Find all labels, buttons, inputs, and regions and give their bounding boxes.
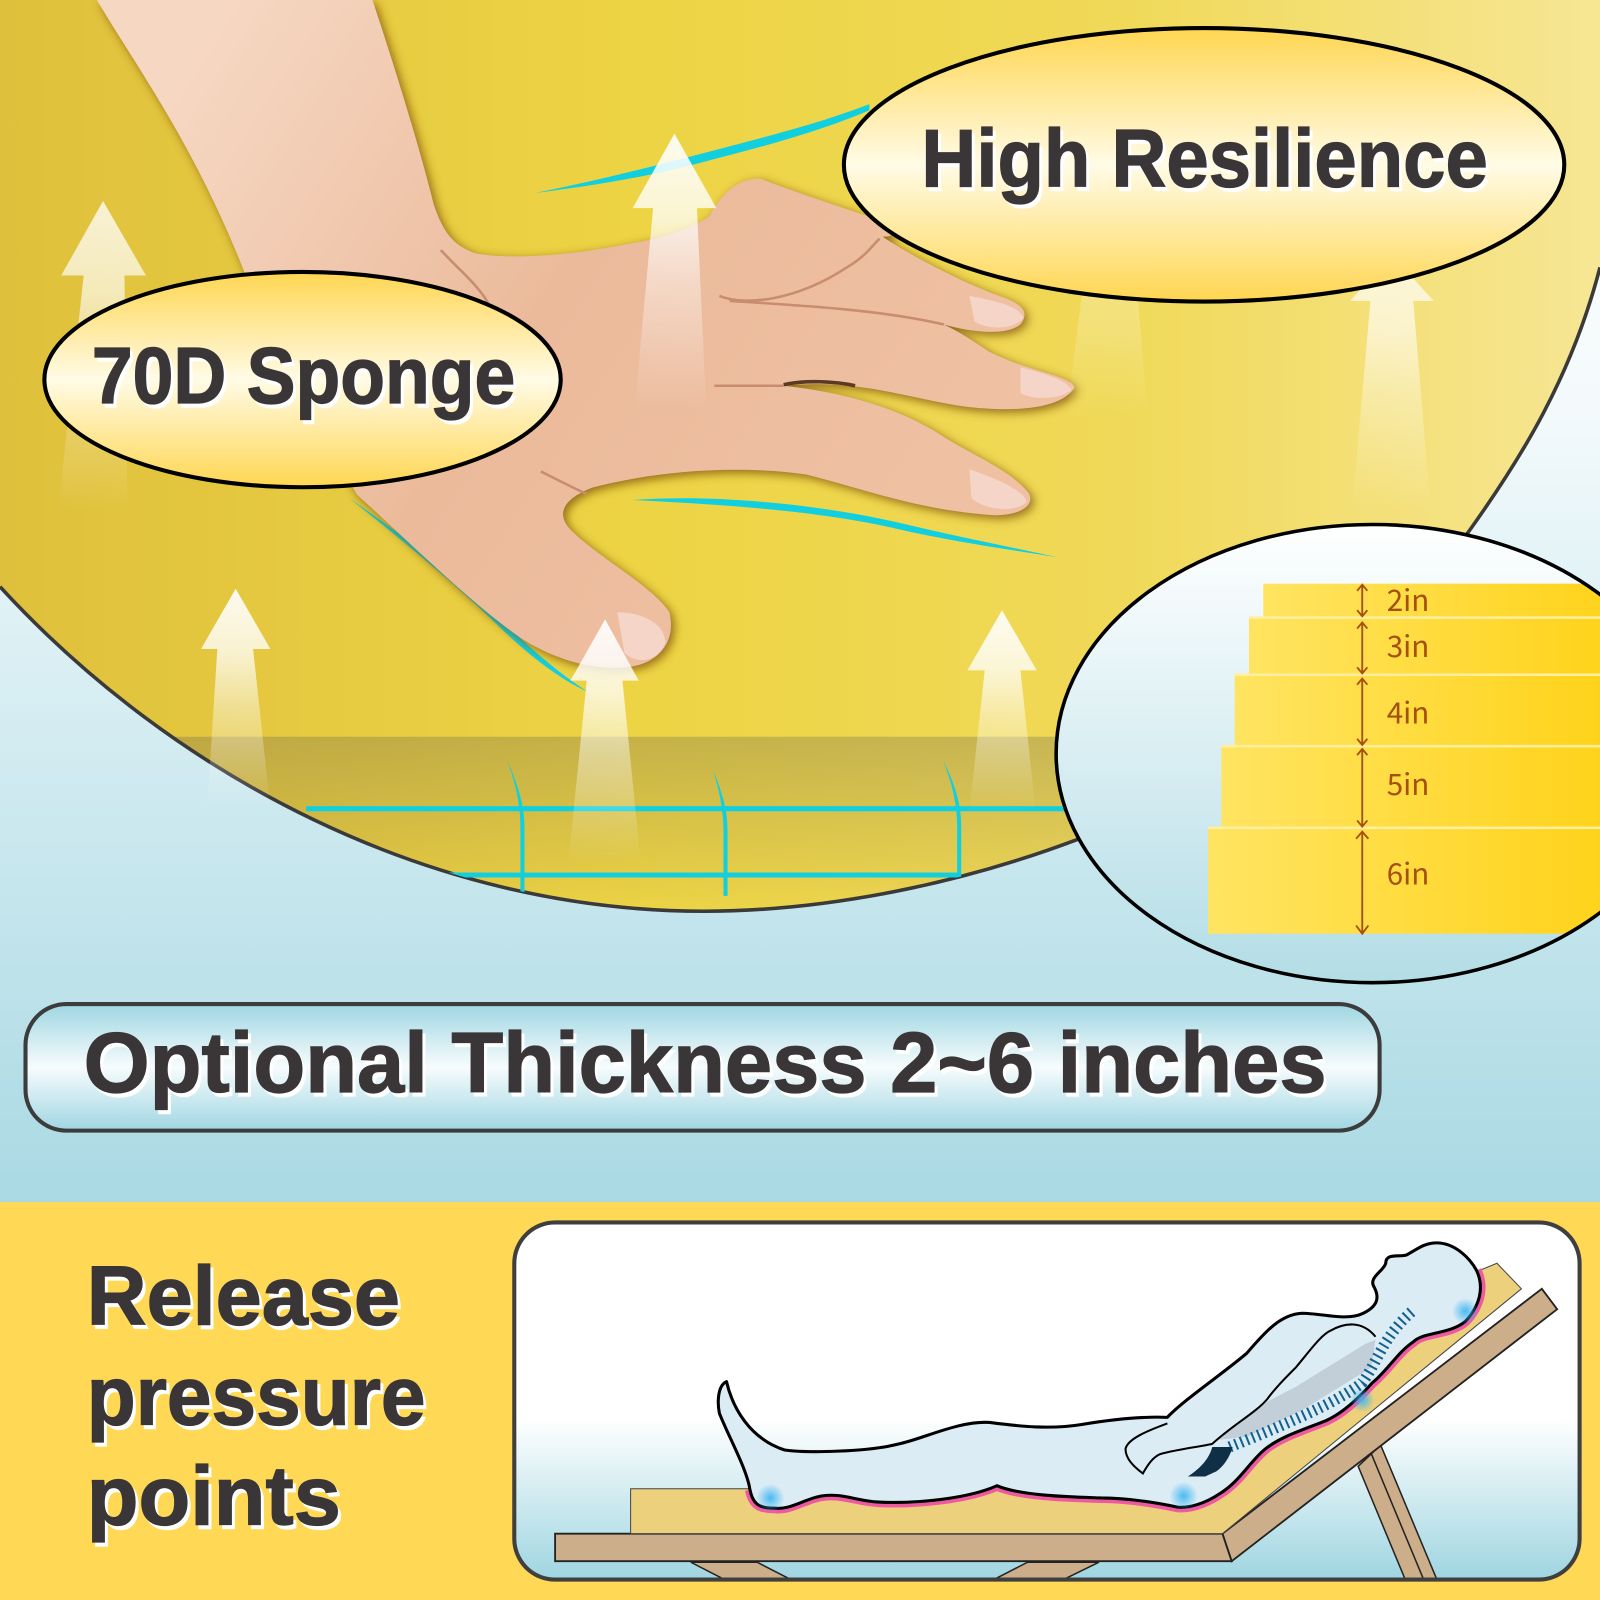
thickness labels: 4in xyxy=(1387,689,1429,732)
foam thickness steps xyxy=(1208,584,1600,934)
arrow: over hand xyxy=(633,134,716,408)
callout: High Resilience xyxy=(844,28,1564,302)
thickness labels xyxy=(1387,577,1429,894)
heading: release pressure points: pressure xyxy=(87,1348,426,1442)
arm outline xyxy=(1126,1324,1376,1473)
bed legs xyxy=(691,1445,1438,1582)
callout: High Resilience: High Resilience xyxy=(921,114,1488,205)
measure arrows xyxy=(1356,585,1368,934)
bed board xyxy=(555,1289,1557,1561)
arrow: faint behind bubble xyxy=(1066,296,1148,418)
banner: optional thickness: Optional Thickness 2~6 inches xyxy=(84,1015,1327,1111)
bottom yellow band xyxy=(0,1202,1600,1600)
thickness labels: 5in xyxy=(1387,761,1429,804)
panel: thickness inset xyxy=(1056,524,1600,983)
foam layer xyxy=(631,1263,1521,1534)
cyan compression lines xyxy=(306,104,1071,896)
background gradient xyxy=(0,0,1600,1224)
heading: release pressure points: Release xyxy=(87,1248,400,1342)
thickness labels: 3in xyxy=(1387,623,1429,666)
yellow foam surface xyxy=(0,0,1600,915)
callout: 70D Sponge: 70D Sponge xyxy=(92,331,515,420)
upward white arrows xyxy=(58,134,1434,862)
rib cage shading xyxy=(1219,1340,1376,1440)
thickness labels: 6in xyxy=(1387,851,1429,894)
pressure contour line xyxy=(750,1270,1480,1508)
arrow: far left xyxy=(58,201,146,510)
pressure spots xyxy=(756,1298,1479,1512)
callout: 70D Sponge xyxy=(44,272,561,487)
arrow: lower left xyxy=(201,589,270,808)
hip shadow xyxy=(1188,1447,1233,1477)
heading: release pressure points: points xyxy=(87,1448,341,1542)
arrow: lower right xyxy=(967,610,1037,811)
arrow: upper right xyxy=(1350,255,1434,510)
spine xyxy=(1230,1310,1413,1447)
thickness labels: 2in xyxy=(1387,577,1429,620)
panel: body on reclined foam xyxy=(514,1222,1580,1582)
human body silhouette xyxy=(718,1243,1480,1508)
heading: release pressure points xyxy=(87,1248,426,1542)
hand pressing on foam xyxy=(97,0,1078,671)
arrow: lower centre xyxy=(568,619,641,862)
